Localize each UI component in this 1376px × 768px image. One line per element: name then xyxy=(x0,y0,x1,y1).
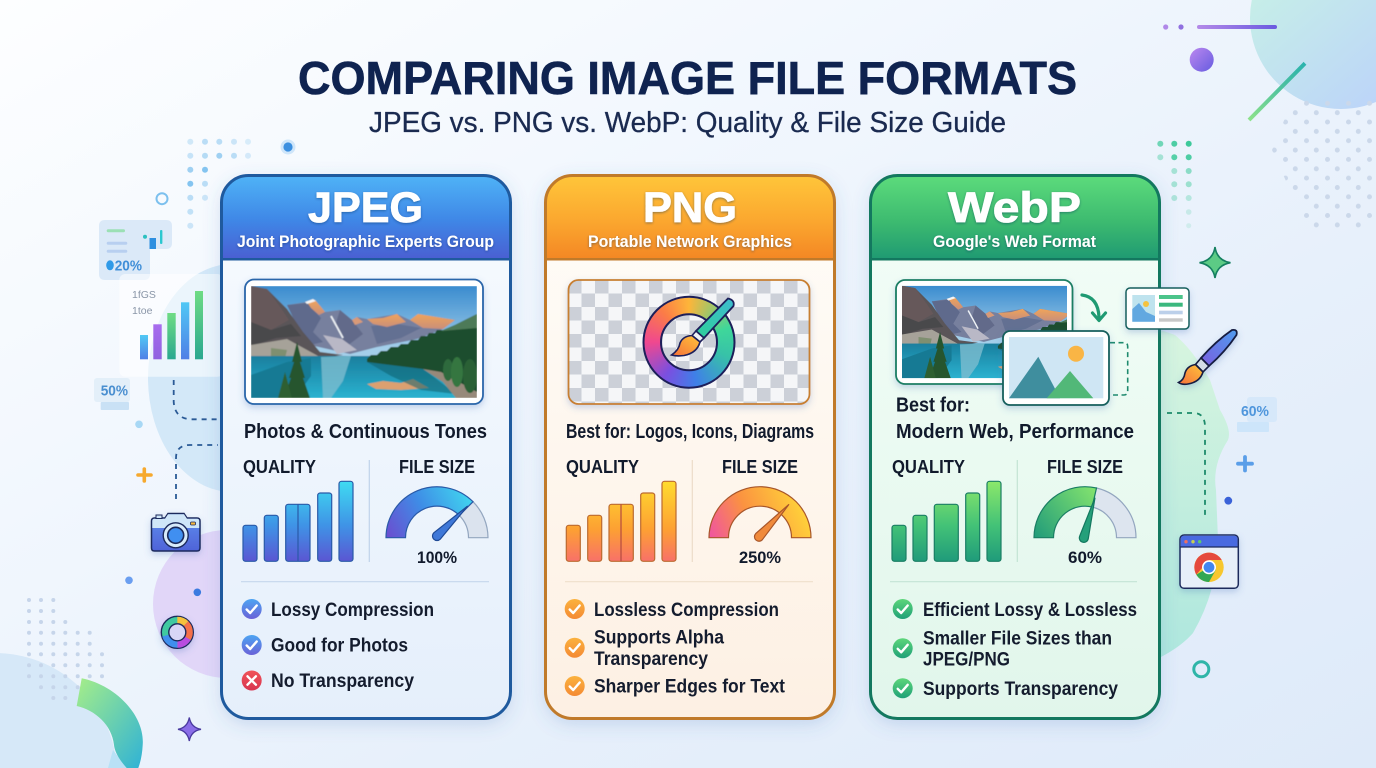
dashed connector right xyxy=(1167,413,1205,517)
blue dot xyxy=(1224,497,1232,505)
JPEG quality bars xyxy=(243,481,353,561)
label 20%: 20% xyxy=(115,258,142,274)
green dot grid xyxy=(1157,141,1192,228)
blue accent dot xyxy=(280,140,296,154)
PNG header: Portable Network Graphics xyxy=(588,232,792,251)
WebP gauge xyxy=(1034,487,1136,542)
WebP best-for text: Modern Web, Performance xyxy=(896,421,1134,443)
tag 50% xyxy=(94,378,130,410)
icon: ring and paintbrush logo xyxy=(643,296,735,388)
icon: browser window with Chrome logo xyxy=(1180,535,1238,588)
floating bar chart card: 1toe xyxy=(132,305,153,317)
PNG header xyxy=(545,175,835,260)
pale dot xyxy=(135,420,143,428)
tag 50%: 50% xyxy=(101,384,128,400)
WebP gauge value: 60% xyxy=(1068,549,1102,567)
blue dots xyxy=(125,576,201,596)
WebP header: Google's Web Format xyxy=(933,232,1096,251)
orange plus xyxy=(138,469,151,481)
decorative background shapes left xyxy=(0,264,316,768)
WebP quality heading: QUALITY xyxy=(892,456,966,477)
WebP feature list: JPEG/PNG xyxy=(923,650,1010,670)
PNG file size heading: FILE SIZE xyxy=(722,456,798,477)
panel: WebP xyxy=(870,175,1160,718)
PNG feature list: Lossless Compression xyxy=(594,600,779,621)
WebP feature list xyxy=(893,599,1137,700)
JPEG header xyxy=(221,175,511,260)
PNG quality bars xyxy=(566,481,676,561)
diagonal green line xyxy=(1248,62,1306,121)
JPEG feature list xyxy=(242,599,434,692)
green arc bottom-left xyxy=(77,678,143,768)
icon: colour wheel xyxy=(161,616,193,648)
panel: PNG xyxy=(545,175,835,718)
decorative background shapes right xyxy=(1155,0,1376,660)
small thumbnail card overlapping WebP panel xyxy=(1126,288,1189,329)
blue plus xyxy=(1238,457,1252,470)
WebP feature list: Smaller File Sizes than xyxy=(923,628,1112,650)
panel: JPEG xyxy=(221,175,511,718)
dashed connector upper xyxy=(174,380,218,419)
blue dot grid top-left xyxy=(187,139,251,229)
icon: paintbrush xyxy=(1178,330,1237,384)
purple sparkle xyxy=(178,718,201,741)
PNG gauge xyxy=(709,487,811,541)
title: COMPARING IMAGE FILE FORMATS xyxy=(298,52,1077,104)
PNG transparency preview xyxy=(568,280,810,404)
floating bar chart card: 1fGS xyxy=(132,289,156,301)
arrow xyxy=(1082,295,1106,320)
dashed outline xyxy=(1110,343,1128,395)
tag 60% xyxy=(1237,397,1277,432)
JPEG best-for text: Photos & Continuous Tones xyxy=(244,421,487,443)
PNG best-for text: Best for: Logos, Icons, Diagrams xyxy=(566,421,814,443)
JPEG quality heading: QUALITY xyxy=(243,456,317,477)
WebP feature list: Efficient Lossy & Lossless xyxy=(923,600,1137,621)
JPEG photo xyxy=(245,280,483,404)
JPEG feature list: Lossy Compression xyxy=(271,600,434,621)
floating bar chart card xyxy=(119,274,223,377)
JPEG gauge value: 100% xyxy=(417,549,457,567)
dashed connector to camera xyxy=(176,445,218,499)
WebP header xyxy=(870,175,1160,260)
subtitle: JPEG vs. PNG vs. WebP: Quality & File Size Guide xyxy=(369,107,1006,139)
floating dashboard card 20% xyxy=(99,220,172,280)
PNG quality heading: QUALITY xyxy=(566,456,640,477)
dot grid bottom-left xyxy=(27,598,104,700)
PNG header: PNG xyxy=(643,184,737,232)
JPEG feature list: Good for Photos xyxy=(271,636,408,656)
WebP best-for text: Best for: xyxy=(896,395,970,417)
purple circle xyxy=(1190,48,1214,72)
JPEG header: JPEG xyxy=(308,184,423,232)
small mountain image xyxy=(1003,331,1109,405)
WebP feature list: Supports Transparency xyxy=(923,679,1118,700)
JPEG feature list: No Transparency xyxy=(271,671,414,692)
PNG feature list: Supports Alpha xyxy=(594,628,724,648)
JPEG file size heading: FILE SIZE xyxy=(399,456,475,477)
PNG gauge value: 250% xyxy=(739,549,781,567)
WebP header: WebP xyxy=(948,184,1081,232)
teal ring xyxy=(1194,662,1209,677)
PNG feature list: Transparency xyxy=(594,649,708,670)
WebP best-for text xyxy=(896,395,1134,443)
JPEG gauge xyxy=(386,487,488,541)
JPEG header: Joint Photographic Experts Group xyxy=(237,232,494,251)
tag 60%: 60% xyxy=(1241,404,1269,420)
top-right purple line with dots xyxy=(1163,24,1277,30)
PNG feature list: Sharper Edges for Text xyxy=(594,676,786,698)
WebP file size heading: FILE SIZE xyxy=(1047,456,1123,477)
Chrome logo xyxy=(1194,553,1224,582)
PNG feature list xyxy=(565,599,786,698)
WebP photo conversion illustration xyxy=(896,280,1128,405)
WebP quality bars xyxy=(892,481,1001,561)
green sparkle xyxy=(1200,247,1230,278)
ring outline xyxy=(156,193,168,204)
icon: camera xyxy=(152,514,200,551)
